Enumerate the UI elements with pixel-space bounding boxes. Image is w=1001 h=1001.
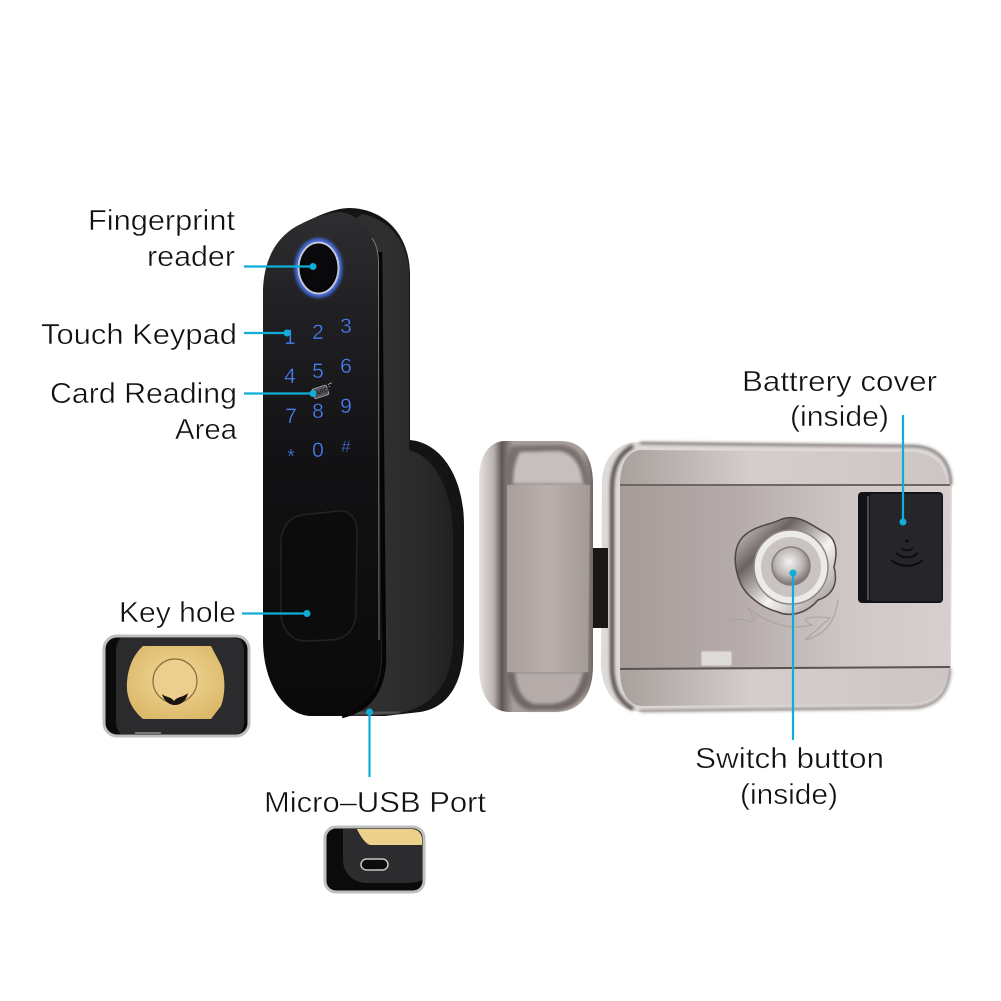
label: card reading area: Area	[175, 414, 238, 446]
keypad digits: 6	[340, 355, 352, 378]
hinge gap	[593, 548, 608, 628]
label: key hole: Key hole	[119, 597, 236, 629]
infographic: smart lock parts	[42, 208, 954, 894]
card reading icon: CARD	[311, 387, 330, 398]
keypad digits: 4	[284, 365, 296, 388]
keypad digits: 8	[312, 400, 324, 423]
lock body lower highlight	[345, 712, 400, 714]
label: fingerprint reader: Fingerprint	[88, 205, 235, 237]
label: card reading area: Card Reading	[50, 378, 237, 410]
label: battery cover: (inside)	[790, 401, 889, 433]
keypad digits: #	[341, 437, 351, 456]
inset: micro USB port	[325, 825, 430, 892]
labels	[41, 205, 937, 819]
keypad digits	[284, 315, 352, 468]
label: fingerprint reader: reader	[147, 241, 235, 273]
battery cover	[858, 492, 943, 603]
lock body side	[340, 214, 453, 716]
strike outer chrome	[479, 441, 593, 712]
face rim	[342, 252, 384, 716]
keypad digits: 7	[285, 405, 297, 428]
card reading icon	[311, 383, 332, 399]
label: switch button: Switch button	[695, 743, 884, 775]
label: switch button	[695, 743, 884, 811]
strike lower shoulder	[507, 672, 590, 710]
strike centre plate	[507, 485, 590, 672]
lock front face	[263, 212, 381, 716]
keypad digits: 2	[312, 321, 324, 344]
main lock box	[601, 442, 952, 712]
label: fingerprint reader	[88, 205, 235, 273]
inset: key hole	[104, 632, 249, 740]
keypad digits: *	[287, 446, 295, 468]
engraved logo	[727, 600, 838, 640]
indicator window	[701, 651, 732, 666]
front lock: handset	[263, 208, 464, 716]
keypad digits: 3	[340, 315, 352, 338]
label: micro USB port: Micro–USB Port	[264, 787, 486, 819]
label: battery cover	[742, 366, 937, 433]
keypad digits: 9	[340, 395, 352, 418]
label: switch button: (inside)	[740, 779, 838, 811]
key hole cover	[281, 511, 357, 641]
keypad digits: 5	[312, 360, 324, 383]
strike inner shoulder	[506, 445, 589, 485]
box left chrome edge	[612, 446, 633, 709]
strike plate	[479, 441, 593, 712]
keypad digits: 1	[284, 326, 296, 349]
wireless icon	[891, 540, 923, 566]
lock mounting bracket and body outline	[300, 208, 464, 716]
label: battery cover: Battrery cover	[742, 366, 937, 398]
fingerprint sensor	[297, 240, 340, 296]
box centre face	[620, 485, 950, 670]
knob	[735, 518, 836, 614]
label: touch keypad: Touch Keypad	[41, 319, 237, 351]
callout lines	[242, 266, 903, 777]
callout dots	[284, 263, 906, 716]
box chrome outline	[601, 442, 952, 712]
label: card reading area	[50, 378, 238, 446]
keypad digits: 0	[312, 439, 324, 462]
